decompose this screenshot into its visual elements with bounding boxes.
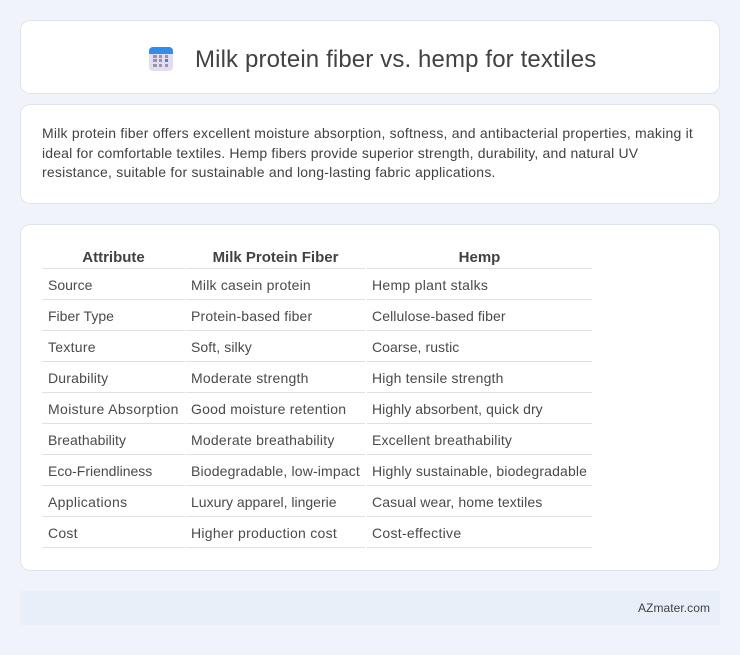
- comparison table: Texture: [48, 339, 96, 355]
- comparison table: Soft, silky: [191, 339, 252, 355]
- comparison table: Cost-effective: [372, 525, 461, 541]
- comparison table: Attribute: [82, 249, 145, 266]
- comparison table: Breathability: [48, 432, 126, 448]
- comparison table: Eco-Friendliness: [48, 463, 152, 479]
- comparison table: Hemp plant stalks: [372, 277, 488, 293]
- comparison table: Moderate breathability: [191, 432, 335, 448]
- text block: summary: [42, 125, 693, 180]
- comparison table: Luxury apparel, lingerie: [191, 494, 337, 510]
- comparison table: Biodegradable, low-impact: [191, 463, 360, 479]
- comparison table: Higher production cost: [191, 525, 337, 541]
- comparison table: Milk Protein Fiber: [213, 249, 338, 266]
- icon: calendar: [149, 47, 173, 71]
- comparison table: High tensile strength: [372, 370, 504, 386]
- comparison table: Moisture Absorption: [48, 401, 179, 417]
- text block: summary: ideal for comfortable textiles. Hemp fibers provide superior strength, durability, and natural UV: [42, 145, 638, 161]
- comparison table: Moderate strength: [191, 370, 309, 386]
- panel: title card: [20, 20, 720, 94]
- comparison table: Highly absorbent, quick dry: [372, 401, 543, 417]
- comparison table: Cellulose-based fiber: [372, 308, 506, 324]
- comparison table: Good moisture retention: [191, 401, 346, 417]
- comparison table: Protein-based fiber: [191, 308, 312, 324]
- panel: comparison table: [20, 224, 720, 571]
- footer bar: [20, 591, 720, 625]
- comparison table: Source: [48, 277, 92, 293]
- comparison table: Fiber Type: [48, 308, 114, 324]
- comparison table: Highly sustainable, biodegradable: [372, 463, 587, 479]
- comparison table: Durability: [48, 370, 108, 386]
- comparison table: Excellent breathability: [372, 432, 512, 448]
- footer: source credit: AZmater.com: [638, 601, 710, 615]
- text block: summary: Milk protein fiber offers excellent moisture absorption, softness, and antibacterial properties, making it: [42, 125, 693, 141]
- title: Milk protein fiber vs. hemp for textiles: [195, 46, 596, 73]
- comparison table: Casual wear, home textiles: [372, 494, 542, 510]
- text block: summary: resistance, suitable for sustainable and long-lasting fabric applications.: [42, 164, 496, 180]
- comparison table: Coarse, rustic: [372, 339, 459, 355]
- panel: summary: [20, 104, 720, 204]
- comparison table: Milk casein protein: [191, 277, 311, 293]
- comparison table: Applications: [48, 494, 127, 510]
- comparison table: Cost: [48, 525, 78, 541]
- comparison table: [42, 249, 592, 548]
- comparison table: Hemp: [459, 249, 500, 266]
